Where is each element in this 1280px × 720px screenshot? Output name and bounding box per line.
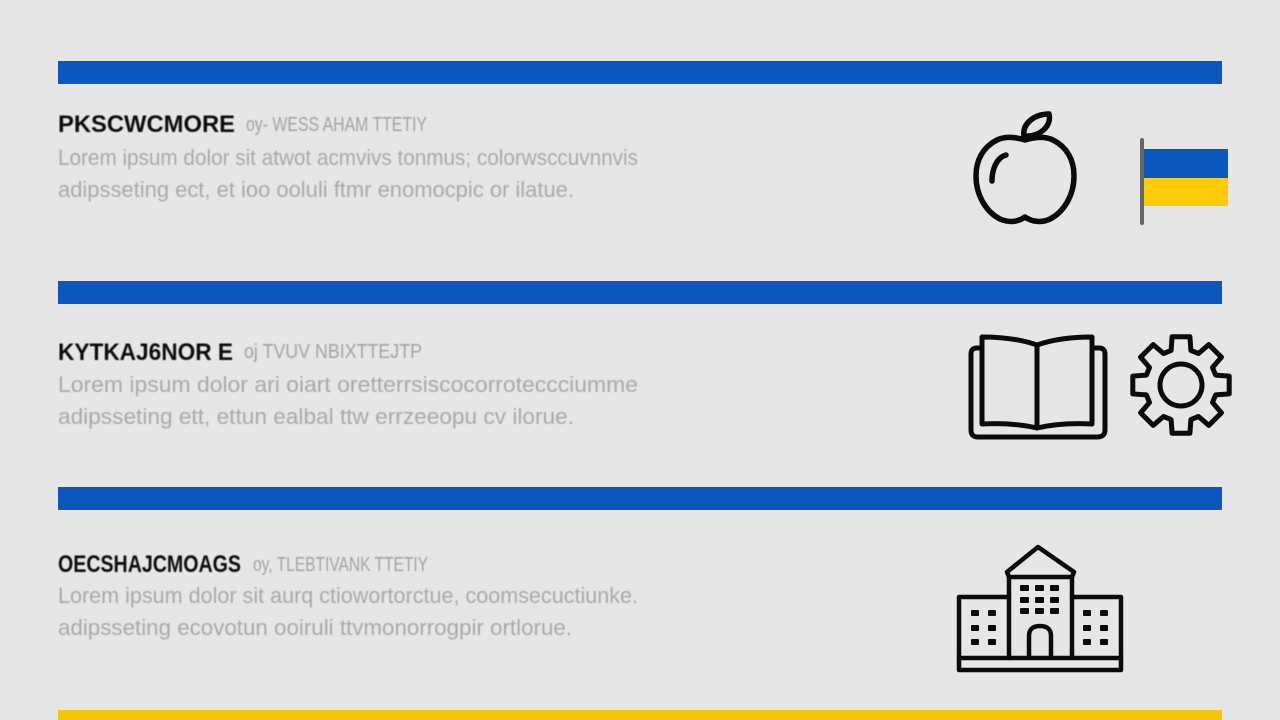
blue bar: section 3: [58, 487, 1222, 510]
panel: section 2 text: [58, 339, 638, 429]
body line 1: section 2: Lorem ipsum dolor ari oiart oretterrsiscocorroteccciumme: [58, 372, 638, 397]
icon: school building: [959, 547, 1121, 670]
body line 2: section 1: adipsseting ect, et ioo ooluli ftmr enomocpic or ilatue.: [58, 177, 574, 202]
subheading: section 2: oj TVUV NBIXTTEJTP: [244, 341, 422, 363]
blue bar: section 2: [58, 281, 1222, 304]
panel: section 3 text: [58, 551, 638, 640]
icon: apple: [976, 114, 1074, 221]
body line 2: section 3: adipsseting ecovotun ooiruli ttvmonorrogpir ortlorue.: [58, 615, 572, 640]
body line 1: section 3: Lorem ipsum dolor sit aurq ctiowortorctue, coomsecuctiunke.: [58, 583, 638, 608]
icon: open book: [971, 337, 1105, 437]
icon: gear: [1133, 337, 1229, 433]
panel: section 1 text: [58, 111, 638, 202]
icon: Ukrainian flag: [1140, 138, 1228, 225]
heading: section 1: PKSCWCMORE: [58, 111, 235, 138]
heading: section 3: OECSHAJCMOAGS: [58, 551, 241, 578]
body line 2: section 2: adipsseting ett, ettun ealbal ttw errzeeopu cv ilorue.: [58, 404, 574, 429]
subheading: section 3: oy, TLEBTIVANK TTETIY: [253, 554, 428, 576]
body line 1: section 1: Lorem ipsum dolor sit atwot acmvivs tonmus; colorwsccuvnnvis: [58, 145, 638, 170]
yellow bar: footer: [58, 710, 1222, 720]
heading: section 2: KYTKAJ6NOR E: [58, 339, 233, 366]
blue bar: section 1: [58, 61, 1222, 84]
subheading: section 1: oy- WESS AHAM TTETIY: [246, 114, 427, 136]
